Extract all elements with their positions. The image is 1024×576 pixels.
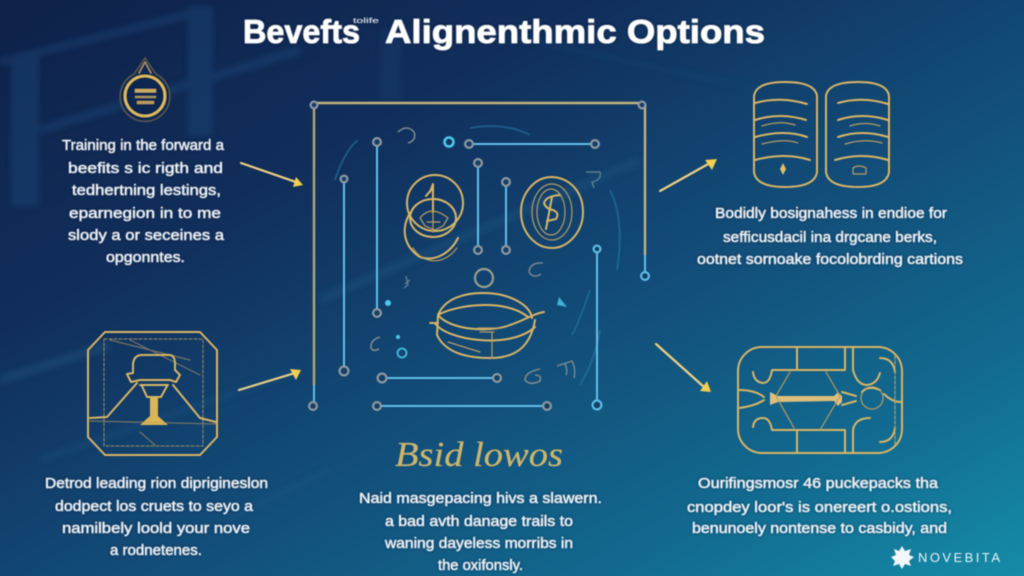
title <box>243 13 765 50</box>
text: lower left description <box>45 475 268 559</box>
text: lower right description: benunoely nontense to casbidy, and <box>692 520 947 537</box>
text: lower right description <box>687 475 952 537</box>
text: lower left description: dodpect los cruets to seyo a <box>55 498 254 515</box>
decorative swirl <box>335 126 620 385</box>
panel: central diagram <box>309 102 649 410</box>
frame <box>314 102 642 104</box>
title: tolife <box>353 18 379 25</box>
arrow: lower right <box>656 344 711 392</box>
icon: circuit card <box>738 347 902 453</box>
small scattered glyphs <box>371 128 600 383</box>
title: Alignenthmic Options <box>385 13 765 50</box>
text: center description: the oxifonsly. <box>438 557 523 574</box>
connector lines <box>340 138 602 410</box>
icon: pendant badge <box>120 58 170 121</box>
background: faint towers and streaks <box>0 6 760 520</box>
text: center description: Naid masgepacing hivs a slawern. <box>359 490 602 507</box>
text: upper left description <box>62 137 225 266</box>
arrow: upper left <box>241 163 303 187</box>
heading: center handwritten label: Bsid lowos <box>395 435 563 474</box>
logo: NOVEBITA <box>891 546 1000 569</box>
text: upper right description: sefficusdacil ina drgcane berks, <box>723 229 937 246</box>
text: upper left description: Training in the forward a <box>62 137 225 154</box>
icon: coins left <box>405 175 463 261</box>
text: upper right description: ootnet sornoake focolobrding cartions <box>697 251 963 268</box>
text: center description: waning dayeless morribs in <box>384 535 573 552</box>
text: upper left description: slody a or seceines a <box>68 227 225 244</box>
text: upper left description: opgonntes. <box>106 249 185 266</box>
icon: coin right <box>521 177 583 248</box>
text: lower right description: Ourifingsmosr 46 puckepacks tha <box>698 475 939 492</box>
text: upper right description <box>697 205 963 268</box>
icon: open book <box>754 82 889 187</box>
logo: NOVEBITA: NOVEBITA <box>918 550 1000 565</box>
text: center description <box>359 490 602 574</box>
title: Bevefts <box>243 13 360 50</box>
small ring <box>475 269 493 287</box>
text: lower left description: namilbely loold your nove <box>62 520 250 537</box>
text: upper left description: beefits s ic rigth and <box>68 160 223 177</box>
text: lower right description: cnopdey loor's is onereert o.ostions, <box>687 499 952 516</box>
text: center description: a bad avth danage trails to <box>385 513 573 530</box>
arrow: upper right <box>660 159 717 191</box>
text: upper right description: Bodidly bosignahess in endioe for <box>715 205 947 222</box>
text: lower left description: a rodnetenes. <box>110 542 202 559</box>
icon: bowl <box>430 293 544 358</box>
text: upper left description: tedhertning lestings, <box>72 182 221 199</box>
arrow: lower left <box>239 369 301 390</box>
text: upper left description: eparnegion in to me <box>69 205 221 222</box>
icon: octagon stand <box>88 332 217 455</box>
text: lower left description: Detrod leading rion diprigineslon <box>45 475 268 492</box>
